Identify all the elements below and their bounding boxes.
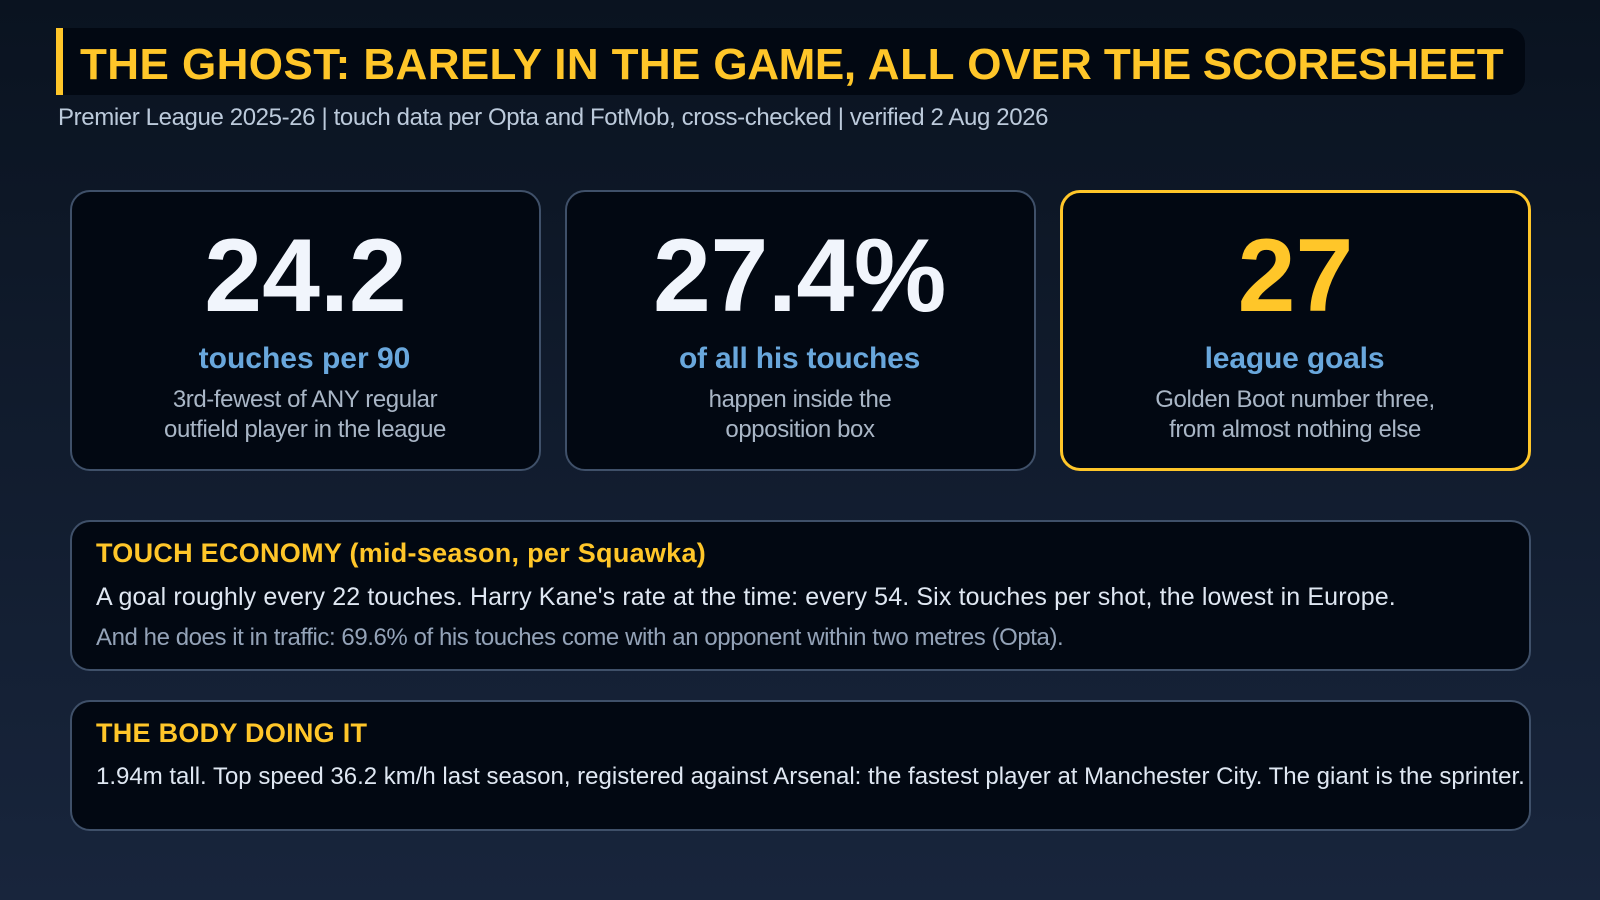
text: traffic: And he does it in traffic: 69.6% of his touches come with an opponent within two metres (Opta). <box>96 624 1063 651</box>
panel: touches per 90 <box>70 190 541 471</box>
panel: touches per 90: touches per 90 <box>199 342 410 375</box>
heading: touch economy: TOUCH ECONOMY (mid-season, per Squawka) <box>96 538 706 568</box>
panel: touches in the box: 27.4% <box>653 218 946 334</box>
panel: touches in the box: of all his touches <box>679 342 920 375</box>
panel: touches per 90: outfield player in the league <box>164 416 446 443</box>
panel: league goals <box>1060 190 1531 471</box>
text: physique: 1.94m tall. Top speed 36.2 km/h last season, registered against Arsenal: the fastest player at Manchester City. The giant is the sprinter. <box>96 763 1525 790</box>
panel: league goals: league goals <box>1205 342 1384 375</box>
panel: touches in the box: opposition box <box>725 416 875 443</box>
panel: touches in the box <box>565 190 1036 471</box>
text: goal rate: A goal roughly every 22 touches. Harry Kane's rate at the time: every 54. Six touches per shot, the lowest in Europe. <box>96 583 1396 611</box>
heading: the body doing it: THE BODY DOING IT <box>96 718 367 748</box>
subtitle: Premier League 2025-26 | touch data per Opta and FotMob, cross-checked | verified 2 Aug 2026 <box>58 104 1048 131</box>
panel: league goals: Golden Boot number three, <box>1155 386 1435 413</box>
panel: touches per 90: 24.2 <box>204 218 407 334</box>
title: THE GHOST: BARELY IN THE GAME, ALL OVER THE SCORESHEET <box>80 40 1503 89</box>
panel: league goals: 27 <box>1238 218 1353 334</box>
panel: league goals: from almost nothing else <box>1169 416 1421 443</box>
panel: the body doing it <box>70 700 1531 831</box>
panel: touch economy <box>70 520 1531 671</box>
panel: touches in the box: happen inside the <box>709 386 891 413</box>
panel: touches per 90: 3rd-fewest of ANY regular <box>173 386 437 413</box>
